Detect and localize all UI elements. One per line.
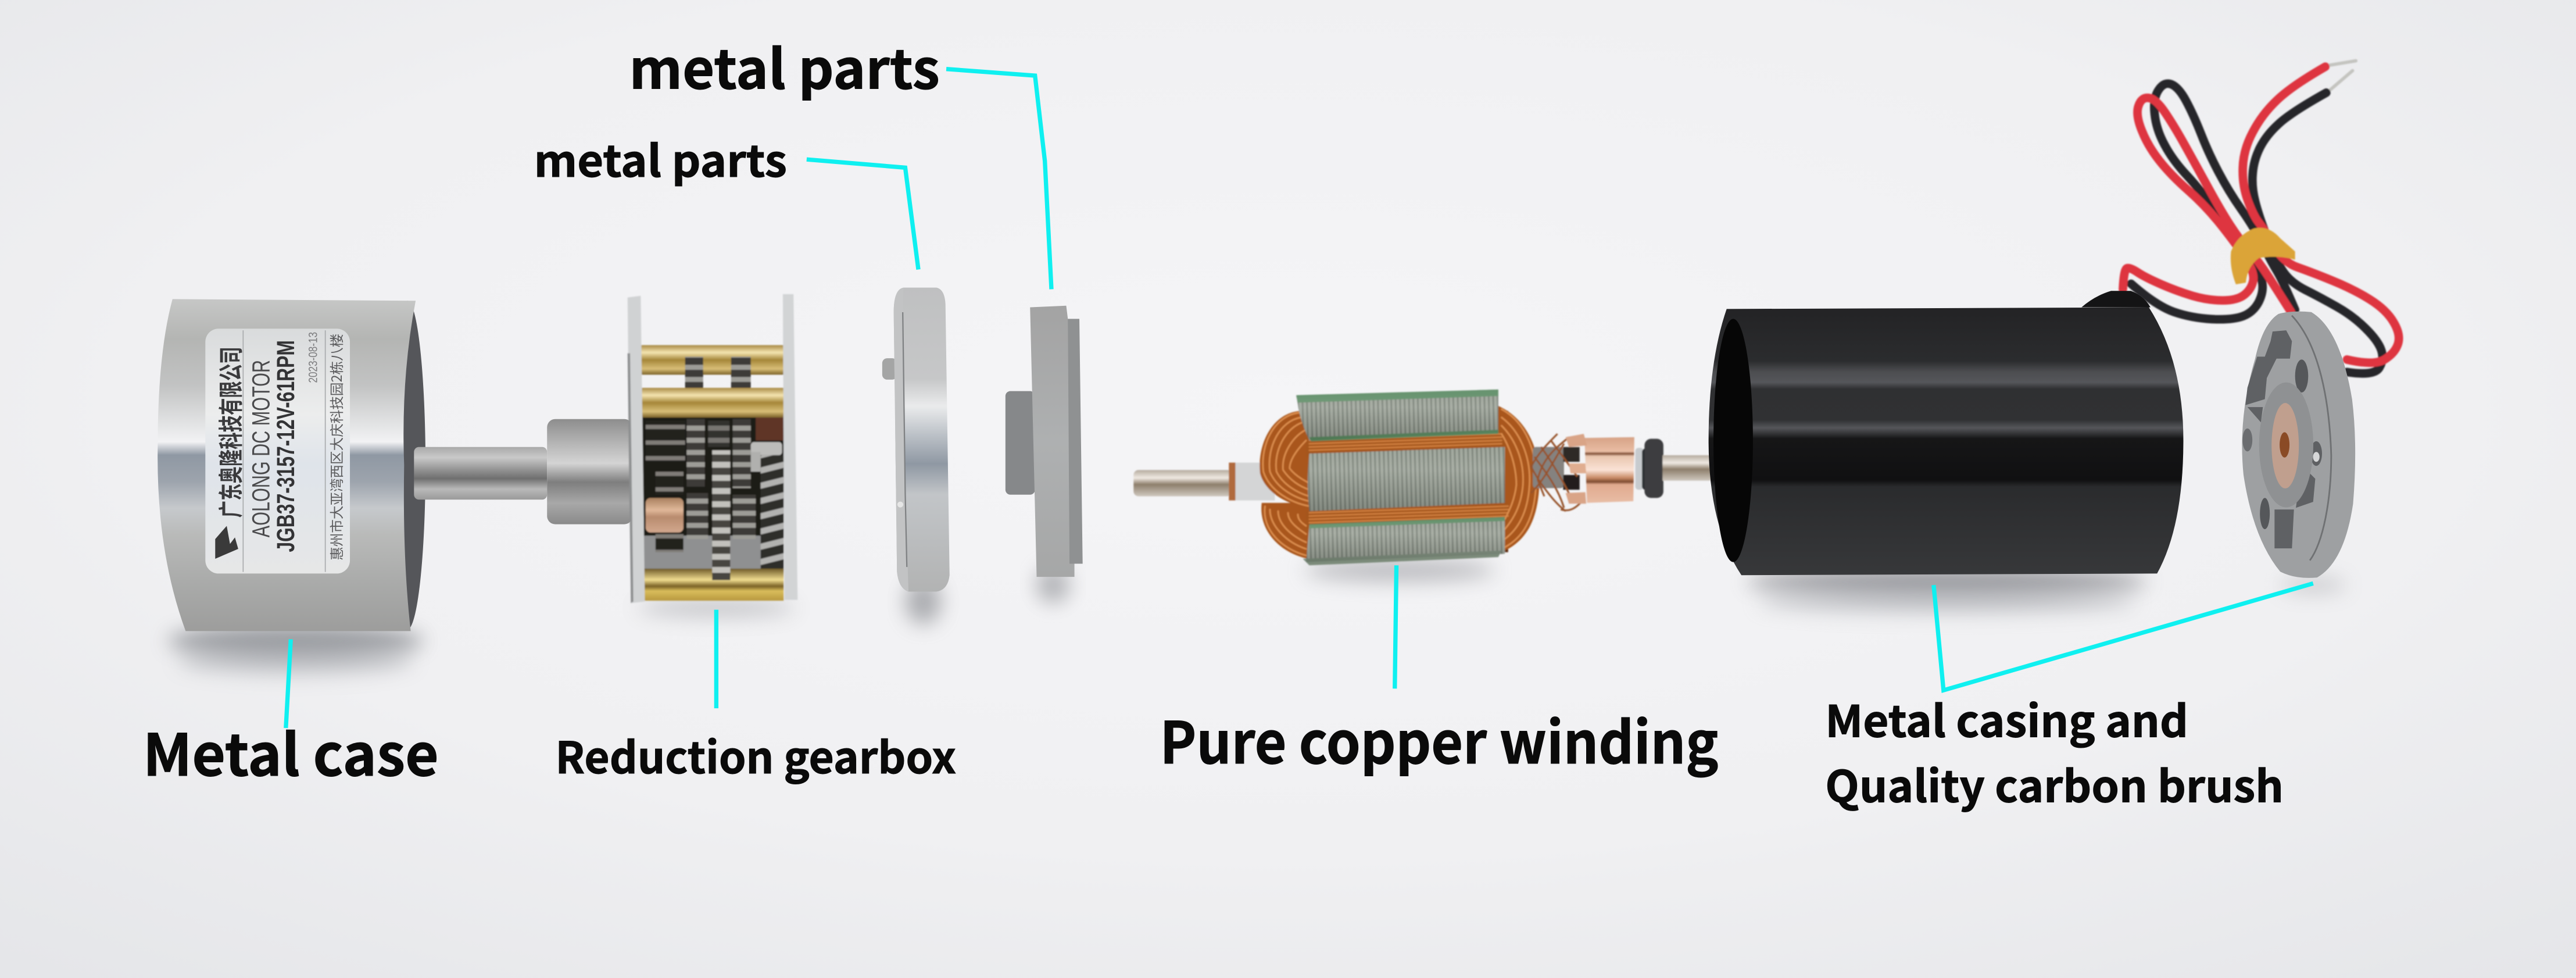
copper bush bbox=[646, 498, 684, 533]
gear cavity bbox=[642, 417, 783, 536]
lamination middle bbox=[1308, 447, 1505, 511]
red wire tail bbox=[2243, 67, 2399, 363]
heading: casing and brush: Metal casing and bbox=[1825, 687, 2188, 750]
black wire tail bbox=[2252, 92, 2382, 373]
part: metal plate 2 bbox=[1006, 306, 1083, 577]
rotor rear shaft bbox=[1662, 455, 1713, 481]
black washer bbox=[1636, 448, 1644, 490]
part: black motor casing bbox=[1709, 291, 2183, 575]
leader: casing and brush bbox=[1934, 583, 2313, 690]
part: metal plate 1 bbox=[882, 288, 950, 592]
product label: 2023-08-13 bbox=[307, 332, 320, 383]
leader: metal case bbox=[286, 639, 291, 728]
product label: AOLONG DC MOTOR bbox=[248, 360, 275, 537]
commutator lead mesh bbox=[1531, 434, 1580, 511]
cap rim bbox=[2242, 312, 2355, 578]
lamination top bbox=[1296, 390, 1498, 441]
product label: JGB37-3157-12V-61RPM bbox=[272, 340, 299, 552]
casing opening bbox=[1713, 319, 1753, 562]
heading: metal parts small: metal parts bbox=[534, 126, 787, 190]
rim ridge bbox=[2292, 316, 2331, 561]
part: output shaft and boss bbox=[414, 419, 632, 524]
screws bbox=[2242, 429, 2252, 451]
red wire loop bbox=[2123, 98, 2291, 312]
heading: metal case: Metal case bbox=[143, 709, 439, 793]
shadows under parts bbox=[167, 559, 2346, 676]
copper commutator bbox=[1584, 437, 1634, 503]
rotor end shaft bbox=[1133, 470, 1232, 497]
black wire loop bbox=[2131, 84, 2295, 319]
heading: casing and brush: Quality carbon brush bbox=[1825, 751, 2284, 815]
part: rotor armature bbox=[1133, 390, 1713, 565]
copper coils bbox=[1260, 406, 1540, 559]
insulating collar bbox=[1229, 463, 1275, 501]
grommet bbox=[2081, 291, 2151, 308]
cap recesses bbox=[2245, 330, 2292, 405]
heading: metal parts large: metal parts bbox=[629, 26, 940, 105]
part: brush end cap bbox=[2242, 312, 2355, 578]
part: lead wires bbox=[2123, 61, 2399, 373]
bare wire tips bbox=[2326, 61, 2356, 90]
leader: metal parts second bbox=[807, 159, 918, 270]
orange tie bbox=[2231, 228, 2295, 284]
brass spacer rods bbox=[641, 345, 783, 374]
case inner rim bbox=[389, 301, 425, 630]
commutator core bbox=[1533, 447, 1564, 488]
leader: reduction gearbox bbox=[715, 610, 717, 708]
plate nub bbox=[882, 358, 897, 380]
casing body bbox=[1709, 308, 2183, 575]
leader: copper winding bbox=[1395, 565, 1397, 688]
logo mark bbox=[215, 526, 238, 559]
product label: 惠州市大亚湾西区大庆科技园2栋八楼 bbox=[325, 334, 346, 561]
bronze bearing bbox=[2271, 403, 2299, 488]
small gears bbox=[685, 356, 703, 388]
part: reduction gearbox bbox=[628, 294, 797, 603]
part: metal gearbox case bbox=[158, 299, 425, 631]
lamination bottom bbox=[1303, 517, 1505, 565]
product label bbox=[205, 329, 350, 573]
heading: pure copper winding: Pure copper winding bbox=[1160, 697, 1719, 780]
heading: reduction gearbox: Reduction gearbox bbox=[555, 723, 956, 786]
leader: metal parts top bbox=[946, 69, 1051, 289]
hub bbox=[2259, 383, 2313, 508]
face tone bbox=[2295, 359, 2308, 392]
side plates bbox=[628, 296, 645, 603]
case body bbox=[158, 299, 416, 631]
product label: 广东奥隆科技有限公司 bbox=[212, 347, 248, 517]
